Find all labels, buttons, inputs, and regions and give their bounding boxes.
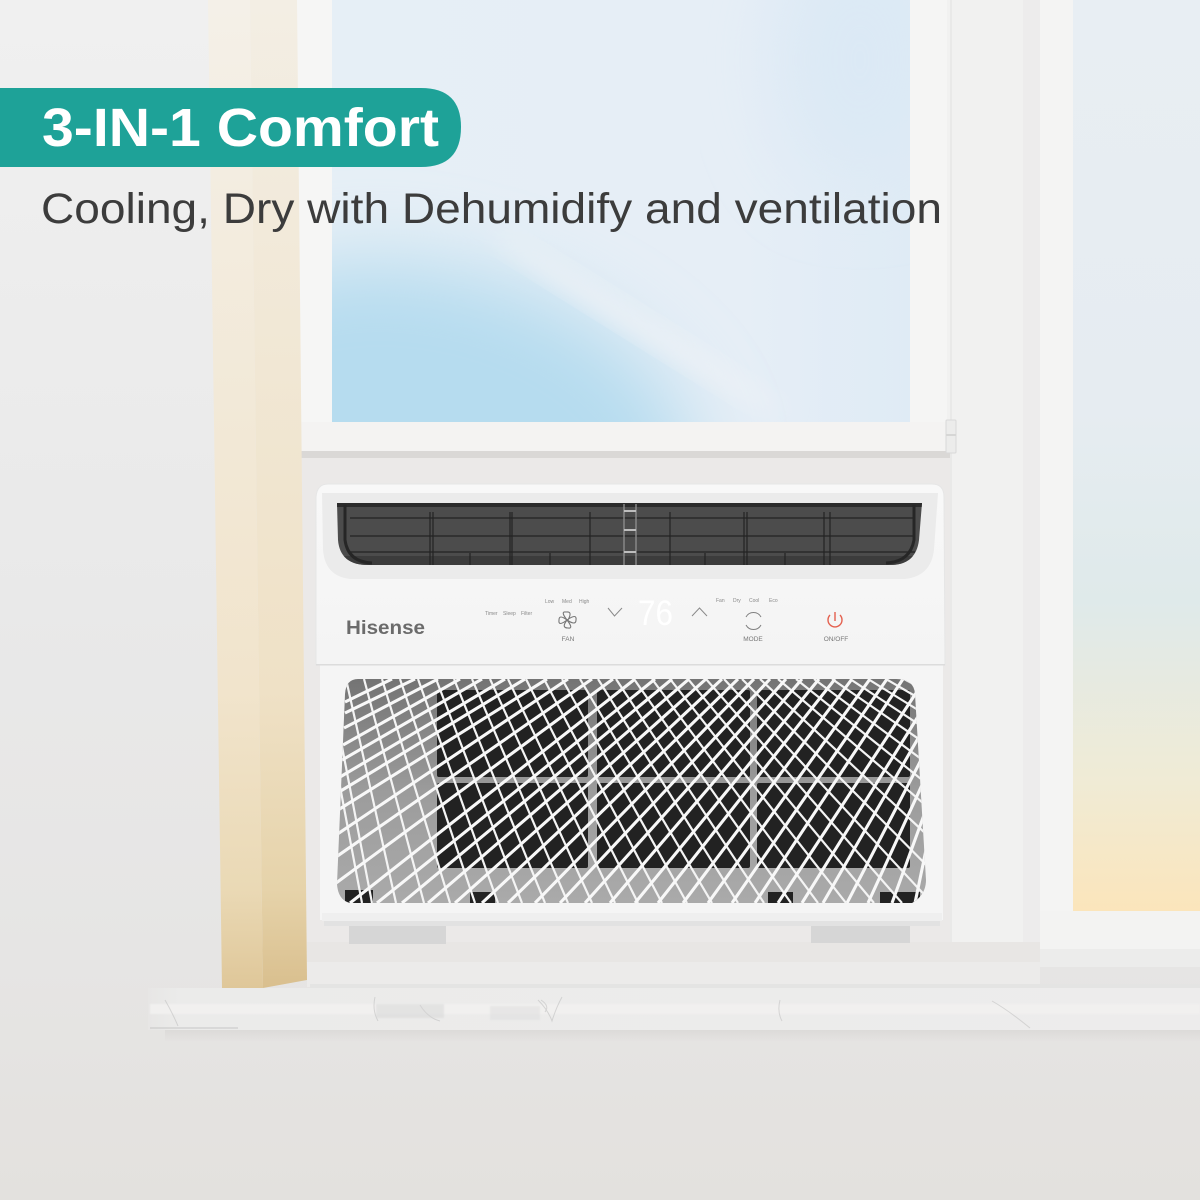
fan label: FAN bbox=[562, 636, 575, 643]
right window pane: sky bbox=[1073, 0, 1200, 911]
icon: fan bbox=[559, 612, 576, 628]
icon: sash hinge bbox=[946, 420, 956, 453]
on/off label: ON/OFF bbox=[824, 636, 848, 643]
window insert panel bbox=[300, 458, 1040, 987]
fan speed labels: Low bbox=[545, 599, 555, 605]
mode labels: Dry bbox=[733, 598, 741, 604]
timer sleep filter labels bbox=[485, 611, 532, 617]
timer sleep filter labels: Filter bbox=[521, 611, 532, 617]
mode labels bbox=[716, 598, 778, 604]
fan speed labels: High bbox=[579, 599, 590, 605]
icon: mode bbox=[746, 612, 761, 630]
control panel bbox=[346, 594, 848, 643]
mode label: MODE bbox=[743, 636, 763, 643]
unit top housing bbox=[316, 484, 945, 665]
icon: chevron down bbox=[608, 608, 622, 616]
fan speed labels: Med bbox=[562, 599, 572, 605]
thin lattice bars bbox=[340, 679, 925, 903]
icon: power bbox=[828, 612, 842, 627]
air vent bbox=[337, 503, 923, 570]
front grille bbox=[337, 679, 926, 903]
brand logo: Hisense bbox=[346, 618, 425, 639]
mode labels: Fan bbox=[716, 598, 725, 604]
right window frame bbox=[945, 0, 1200, 967]
title badge bbox=[0, 88, 461, 167]
title: 3-IN-1 Comfort bbox=[42, 98, 439, 158]
wooden trim bbox=[208, 0, 307, 988]
timer sleep filter labels: Sleep bbox=[503, 611, 516, 617]
marble window sill bbox=[148, 984, 1200, 1042]
fan speed labels bbox=[545, 599, 590, 605]
mode labels: Cool bbox=[749, 598, 759, 604]
temperature display: 76 bbox=[638, 594, 673, 633]
mode labels: Eco bbox=[769, 598, 778, 604]
left window pane: sky bbox=[332, 0, 910, 422]
thick lattice bars bbox=[336, 679, 926, 903]
icon: chevron up bbox=[692, 608, 707, 616]
timer sleep filter labels: Timer bbox=[485, 611, 498, 617]
air conditioner bbox=[316, 484, 945, 944]
subtitle: Cooling, Dry with Dehumidify and ventilation bbox=[41, 185, 942, 233]
window sash frame bbox=[296, 0, 950, 460]
unit lower housing bbox=[316, 664, 945, 926]
filter panes bbox=[345, 690, 920, 904]
support feet bbox=[349, 926, 910, 944]
